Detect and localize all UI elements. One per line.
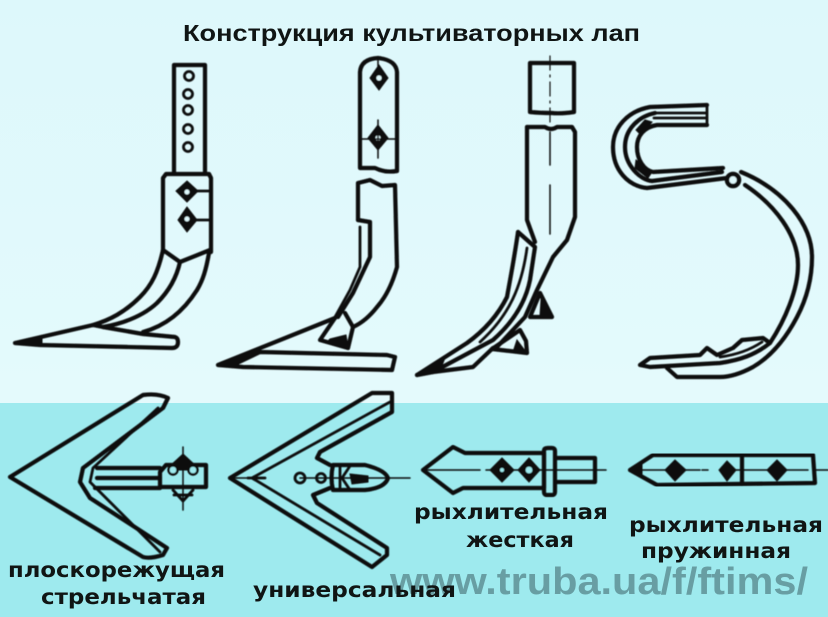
label: spring loosening: пружинная [641,539,791,564]
label: flat-cutting sweep: стрельчатая [41,585,206,610]
side view: flat-cutting sweep tine [15,65,211,348]
background: lower turquoise panel [0,403,828,617]
top view: flat-cutting sweep [10,394,206,558]
label: rigid loosening: жесткая [466,528,574,553]
title: Конструкция культиваторных лап [183,20,640,46]
background: upper light panel [0,0,828,403]
side view: universal tine [218,58,397,370]
side view: spring loosening tine [613,105,812,377]
label: spring loosening [629,513,823,564]
top view: spring loosening tine [630,455,828,485]
top view: universal sweep [230,393,410,567]
label: rigid loosening: рыхлительная [414,500,608,525]
side view: rigid loosening tine [417,56,575,375]
label: spring loosening: рыхлительная [629,513,823,538]
top view: rigid loosening tine [423,447,606,495]
label: rigid loosening [414,500,608,553]
label: flat-cutting sweep [8,558,225,610]
label: universal: универсальная [253,578,456,603]
watermark URL: www.truba.ua/f/ftims/ [389,561,808,603]
label: flat-cutting sweep: плоскорежущая [8,558,225,583]
